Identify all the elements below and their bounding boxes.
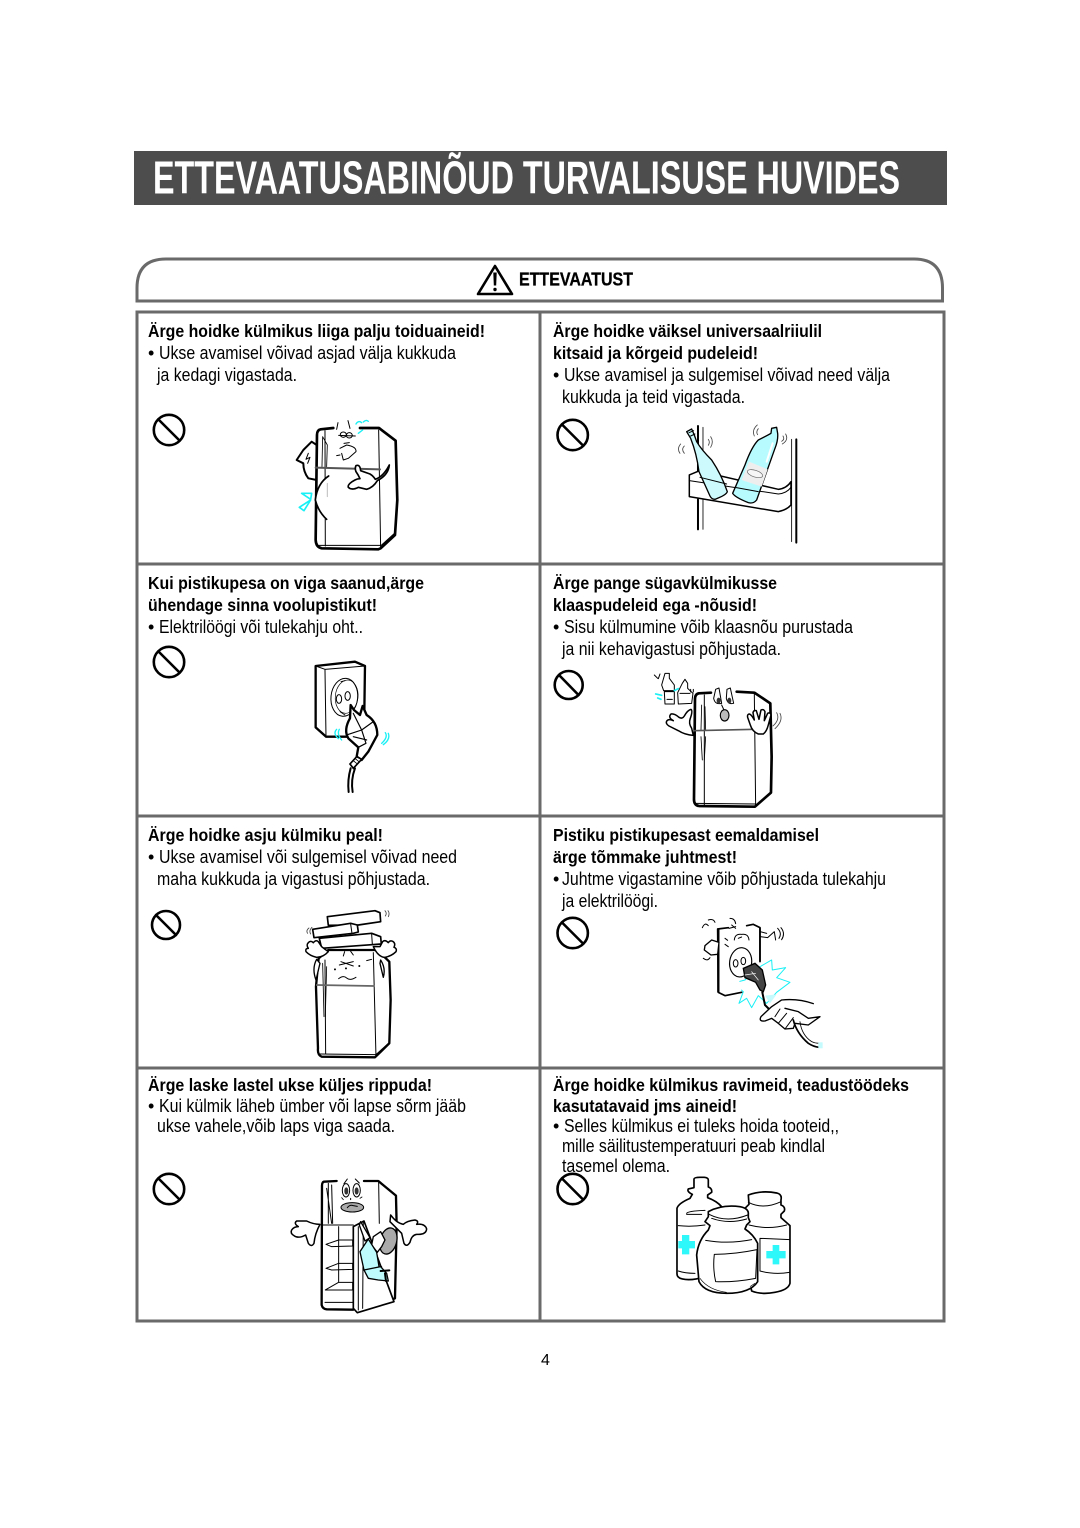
icon: prohibited sign [558, 420, 588, 450]
illustration: child hanging on refrigerator door [291, 1179, 427, 1313]
panel: bottles on shelf: Ukse avamisel ja sulgemisel võivad need välja [564, 365, 891, 385]
panel: children hanging on door: • [148, 1096, 154, 1116]
panel: medicines and scientific materials [540, 1068, 944, 1321]
page number: 4 [541, 1352, 550, 1369]
panel: children hanging on door [137, 1068, 540, 1321]
panel: damaged socket [137, 564, 540, 816]
panel: medicines and scientific materials: Ärge hoidke külmikus ravimeid, teadustöödeks [553, 1075, 909, 1095]
illustration: three medicine bottles [677, 1177, 790, 1293]
icon: warning triangle [478, 266, 512, 294]
panel: too much food: ja kedagi vigastada. [156, 365, 297, 385]
panel: do not pull the cord: Juhtme vigastamine võib põhjustada tulekahju [562, 869, 886, 889]
panel: too much food: • [148, 343, 154, 363]
panel: glass bottles in freezer: klaaspudeleid ega -nõusid! [553, 595, 757, 615]
illustration: hand pulling cord from socket [702, 918, 823, 1048]
icon: prohibited sign [154, 647, 184, 677]
panel: damaged socket: Elektrilöögi või tulekahju oht.. [159, 617, 363, 637]
panel: bottles on shelf: Ärge hoidke väiksel universaalriiulil [553, 321, 822, 341]
panel: do not pull the cord: ja elektrilöögi. [561, 891, 658, 911]
illustration: bottles falling from door shelf [678, 425, 796, 543]
illustration: surprised refrigerator with bottles [654, 673, 781, 807]
caution header box [137, 259, 942, 301]
illustration: plug at damaged socket [316, 662, 389, 792]
panel: glass bottles in freezer: Ärge pange sügavkülmikusse [553, 573, 777, 593]
panel: medicines and scientific materials: • [553, 1116, 559, 1136]
icon: prohibited sign [154, 415, 184, 445]
illustration: refrigerator holding boxes [306, 911, 396, 1057]
panel: nothing on top of refrigerator: Ukse avamisel või sulgemisel võivad need [159, 847, 457, 867]
icon: prohibited sign [558, 1174, 588, 1204]
icon: prohibited sign [555, 671, 583, 699]
panel: bottles on shelf: kitsaid ja kõrgeid pudeleid! [553, 343, 758, 363]
panel: medicines and scientific materials: mille säilitustemperatuuri peab kindlal [562, 1136, 825, 1156]
panel: children hanging on door: Ärge laske lastel ukse küljes rippuda! [148, 1075, 432, 1095]
panel: children hanging on door: Kui külmik läheb ümber või lapse sõrm jääb [159, 1096, 466, 1116]
panel: glass bottles in freezer [540, 564, 944, 816]
illustration: overfull refrigerator [297, 420, 397, 549]
panel: nothing on top of refrigerator [137, 816, 540, 1068]
panel: too much food: Ärge hoidke külmikus liiga palju toiduaineid! [148, 321, 485, 341]
panel: too much food [137, 312, 540, 564]
panel: medicines and scientific materials: kasutatavaid jms aineid! [553, 1096, 737, 1116]
panel: nothing on top of refrigerator: maha kukkuda ja vigastusi põhjustada. [157, 869, 430, 889]
panel: medicines and scientific materials: Selles külmikus ei tuleks hoida tooteid,, [564, 1116, 839, 1136]
panel: damaged socket: • [148, 617, 154, 637]
panel: nothing on top of refrigerator: Ärge hoidke asju külmiku peal! [148, 825, 383, 845]
panel: glass bottles in freezer: • [553, 617, 559, 637]
icon: prohibited sign [154, 1174, 184, 1204]
panel: medicines and scientific materials: tasemel olema. [562, 1156, 670, 1176]
panel: glass bottles in freezer: Sisu külmumine võib klaasnõu purustada [564, 617, 854, 637]
panel: bottles on shelf: kukkuda ja teid vigastada. [562, 387, 745, 407]
icon: prohibited sign [558, 918, 588, 948]
caution header box: ETTEVAATUST [519, 270, 633, 290]
panel: nothing on top of refrigerator: • [148, 847, 154, 867]
panel: glass bottles in freezer: ja nii kehavigastusi põhjustada. [561, 639, 781, 659]
panel: do not pull the cord: Pistiku pistikupesast eemaldamisel [553, 825, 819, 845]
panel: do not pull the cord: ärge tõmmake juhtmest! [553, 847, 737, 867]
panel: do not pull the cord [540, 816, 944, 1068]
panel: children hanging on door: ukse vahele,võib laps viga saada. [157, 1116, 395, 1136]
panel: bottles on shelf [540, 312, 944, 564]
icon: prohibited sign [152, 911, 180, 939]
panel: do not pull the cord: • [553, 869, 559, 889]
panel: damaged socket: Kui pistikupesa on viga saanud,ärge [148, 573, 424, 593]
panel: bottles on shelf: • [553, 365, 559, 385]
panel: too much food: Ukse avamisel võivad asjad välja kukkuda [159, 343, 457, 363]
panel: damaged socket: ühendage sinna voolupistikut! [148, 595, 377, 615]
